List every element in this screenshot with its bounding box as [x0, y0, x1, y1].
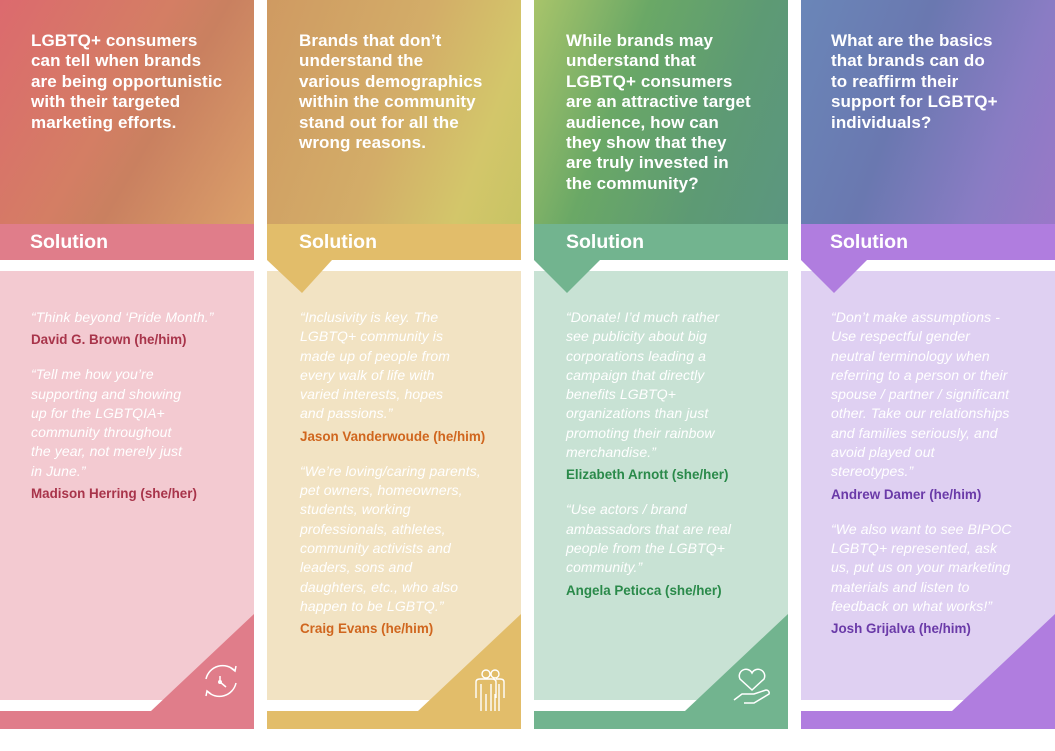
solution band 1: [0, 224, 254, 260]
quotes 4: stereotypes.”: [831, 463, 913, 479]
quotes 2: happen to be LGBTQ.”: [300, 598, 444, 614]
quotes 4: other. Take our relationships: [831, 405, 1010, 421]
panel: column 3: [534, 0, 788, 729]
question 3: LGBTQ+ consumers: [566, 72, 732, 91]
quotes 1: “Think beyond ‘Pride Month.”: [31, 309, 214, 325]
quotes 2: made up of people from: [300, 348, 450, 364]
question 2: various demographics: [299, 72, 482, 91]
quotes 4: referring to a person or their: [831, 367, 1008, 383]
quotes 2: Jason Vanderwoude (he/him): [300, 429, 485, 444]
question 3: While brands may: [566, 31, 713, 50]
quotes 2: varied interests, hopes: [300, 386, 443, 402]
quote panel 1: [0, 271, 254, 700]
quotes 1: in June.”: [31, 463, 86, 479]
quotes 4: “Don’t make assumptions -: [831, 309, 1000, 325]
solution band 3: Solution: [566, 231, 644, 253]
quotes 3: merchandise.”: [566, 444, 656, 460]
quotes 1: David G. Brown (he/him): [31, 332, 186, 347]
panel: column 2: [267, 0, 521, 729]
quotes 1: supporting and showing: [31, 386, 181, 402]
quotes 2: “We’re loving/caring parents,: [300, 463, 481, 479]
question 1: can tell when brands: [31, 51, 201, 70]
quotes 4: spouse / partner / significant: [831, 386, 1009, 402]
quotes 3: corporations leading a: [566, 348, 706, 364]
quotes 3: see publicity about big: [566, 328, 707, 344]
quotes 2: community activists and: [300, 540, 451, 556]
quotes 1: Madison Herring (she/her): [31, 486, 197, 501]
quotes 3: community.”: [566, 559, 642, 575]
quotes 3: “Donate! I’d much rather: [566, 309, 719, 325]
quotes 2: [300, 309, 485, 636]
quotes 3: ambassadors that are real: [566, 521, 731, 537]
quotes 2: pet owners, homeowners,: [300, 482, 463, 498]
solution band 3: [534, 224, 788, 260]
question 2: understand the: [299, 51, 423, 70]
corner triangle with clock icon: [151, 614, 254, 711]
quotes 3: campaign that directly: [566, 367, 704, 383]
question 3: [534, 0, 788, 224]
question 2: stand out for all the: [299, 113, 459, 132]
quotes 4: us, put us on your marketing: [831, 559, 1010, 575]
quotes 3: promoting their rainbow: [566, 425, 715, 441]
solution band 2: [267, 224, 521, 260]
corner triangle with people icon: [418, 614, 521, 711]
pointer 3: [534, 260, 600, 293]
question 1: with their targeted: [31, 92, 180, 111]
quotes 2: professionals, athletes,: [300, 521, 446, 537]
quotes 4: materials and listen to: [831, 579, 969, 595]
question 1: are being opportunistic: [31, 72, 222, 91]
quotes 2: Craig Evans (he/him): [300, 621, 433, 636]
solution band 4: Solution: [830, 231, 908, 253]
quotes 4: Josh Grijalva (he/him): [831, 621, 971, 636]
question 4: support for LGBTQ+: [831, 92, 998, 111]
quotes 3: Angela Peticca (she/her): [566, 583, 722, 598]
question 3: the community?: [566, 174, 699, 193]
quotes 2: daughters, etc., who also: [300, 579, 458, 595]
question 2: within the community: [299, 92, 476, 111]
quotes 1: up for the LGBTQIA+: [31, 405, 165, 421]
panel: column 4: [801, 0, 1055, 729]
question 3: understand that: [566, 51, 696, 70]
question 4: to reaffirm their: [831, 72, 958, 91]
quotes 1: “Tell me how you’re: [31, 366, 154, 382]
quotes 2: “Inclusivity is key. The: [300, 309, 438, 325]
quotes 4: neutral terminology when: [831, 348, 990, 364]
question 4: individuals?: [831, 113, 931, 132]
quotes 1: [31, 309, 214, 501]
question 1: marketing efforts.: [31, 113, 176, 132]
quotes 1: community throughout: [31, 424, 172, 440]
solution band 1: Solution: [30, 231, 108, 253]
quotes 2: LGBTQ+ community is: [300, 328, 443, 344]
quotes 4: [831, 309, 1012, 636]
quotes 4: Use respectful gender: [831, 328, 970, 344]
panel: column 1: [0, 0, 254, 729]
quotes 4: LGBTQ+ represented, ask: [831, 540, 997, 556]
quotes 4: avoid played out: [831, 444, 935, 460]
question 3: are truly invested in: [566, 153, 729, 172]
question 1: [0, 0, 254, 224]
quotes 4: and families seriously, and: [831, 425, 998, 441]
quotes 4: feedback on what works!”: [831, 598, 992, 614]
pointer 2: [267, 260, 332, 293]
quotes 4: “We also want to see BIPOC: [831, 521, 1012, 537]
quotes 3: benefits LGBTQ+: [566, 386, 676, 402]
question 2: [267, 0, 521, 224]
question 4: What are the basics: [831, 31, 993, 50]
question 2: wrong reasons.: [299, 133, 426, 152]
quotes 2: students, working: [300, 501, 411, 517]
quotes 4: Andrew Damer (he/him): [831, 487, 981, 502]
quotes 3: organizations than just: [566, 405, 708, 421]
quotes 1: the year, not merely just: [31, 443, 182, 459]
corner triangle with heart-hand icon: [685, 614, 788, 711]
question 3: audience, how can: [566, 113, 719, 132]
solution band 2: Solution: [299, 231, 377, 253]
quotes 2: and passions.”: [300, 405, 392, 421]
question 3: are an attractive target: [566, 92, 751, 111]
quotes 2: every walk of life with: [300, 367, 435, 383]
solution band 4: [801, 224, 1055, 260]
question 4: [801, 0, 1055, 224]
pointer 4: [801, 260, 867, 293]
quotes 3: Elizabeth Arnott (she/her): [566, 467, 728, 482]
quotes 3: [566, 309, 732, 598]
quotes 3: “Use actors / brand: [566, 501, 687, 517]
quotes 2: leaders, sons and: [300, 559, 412, 575]
corner triangle 4: [952, 614, 1055, 711]
question 1: LGBTQ+ consumers: [31, 31, 197, 50]
question 3: they show that they: [566, 133, 727, 152]
quotes 3: people from the LGBTQ+: [566, 540, 725, 556]
question 4: that brands can do: [831, 51, 985, 70]
question 2: Brands that don’t: [299, 31, 441, 50]
